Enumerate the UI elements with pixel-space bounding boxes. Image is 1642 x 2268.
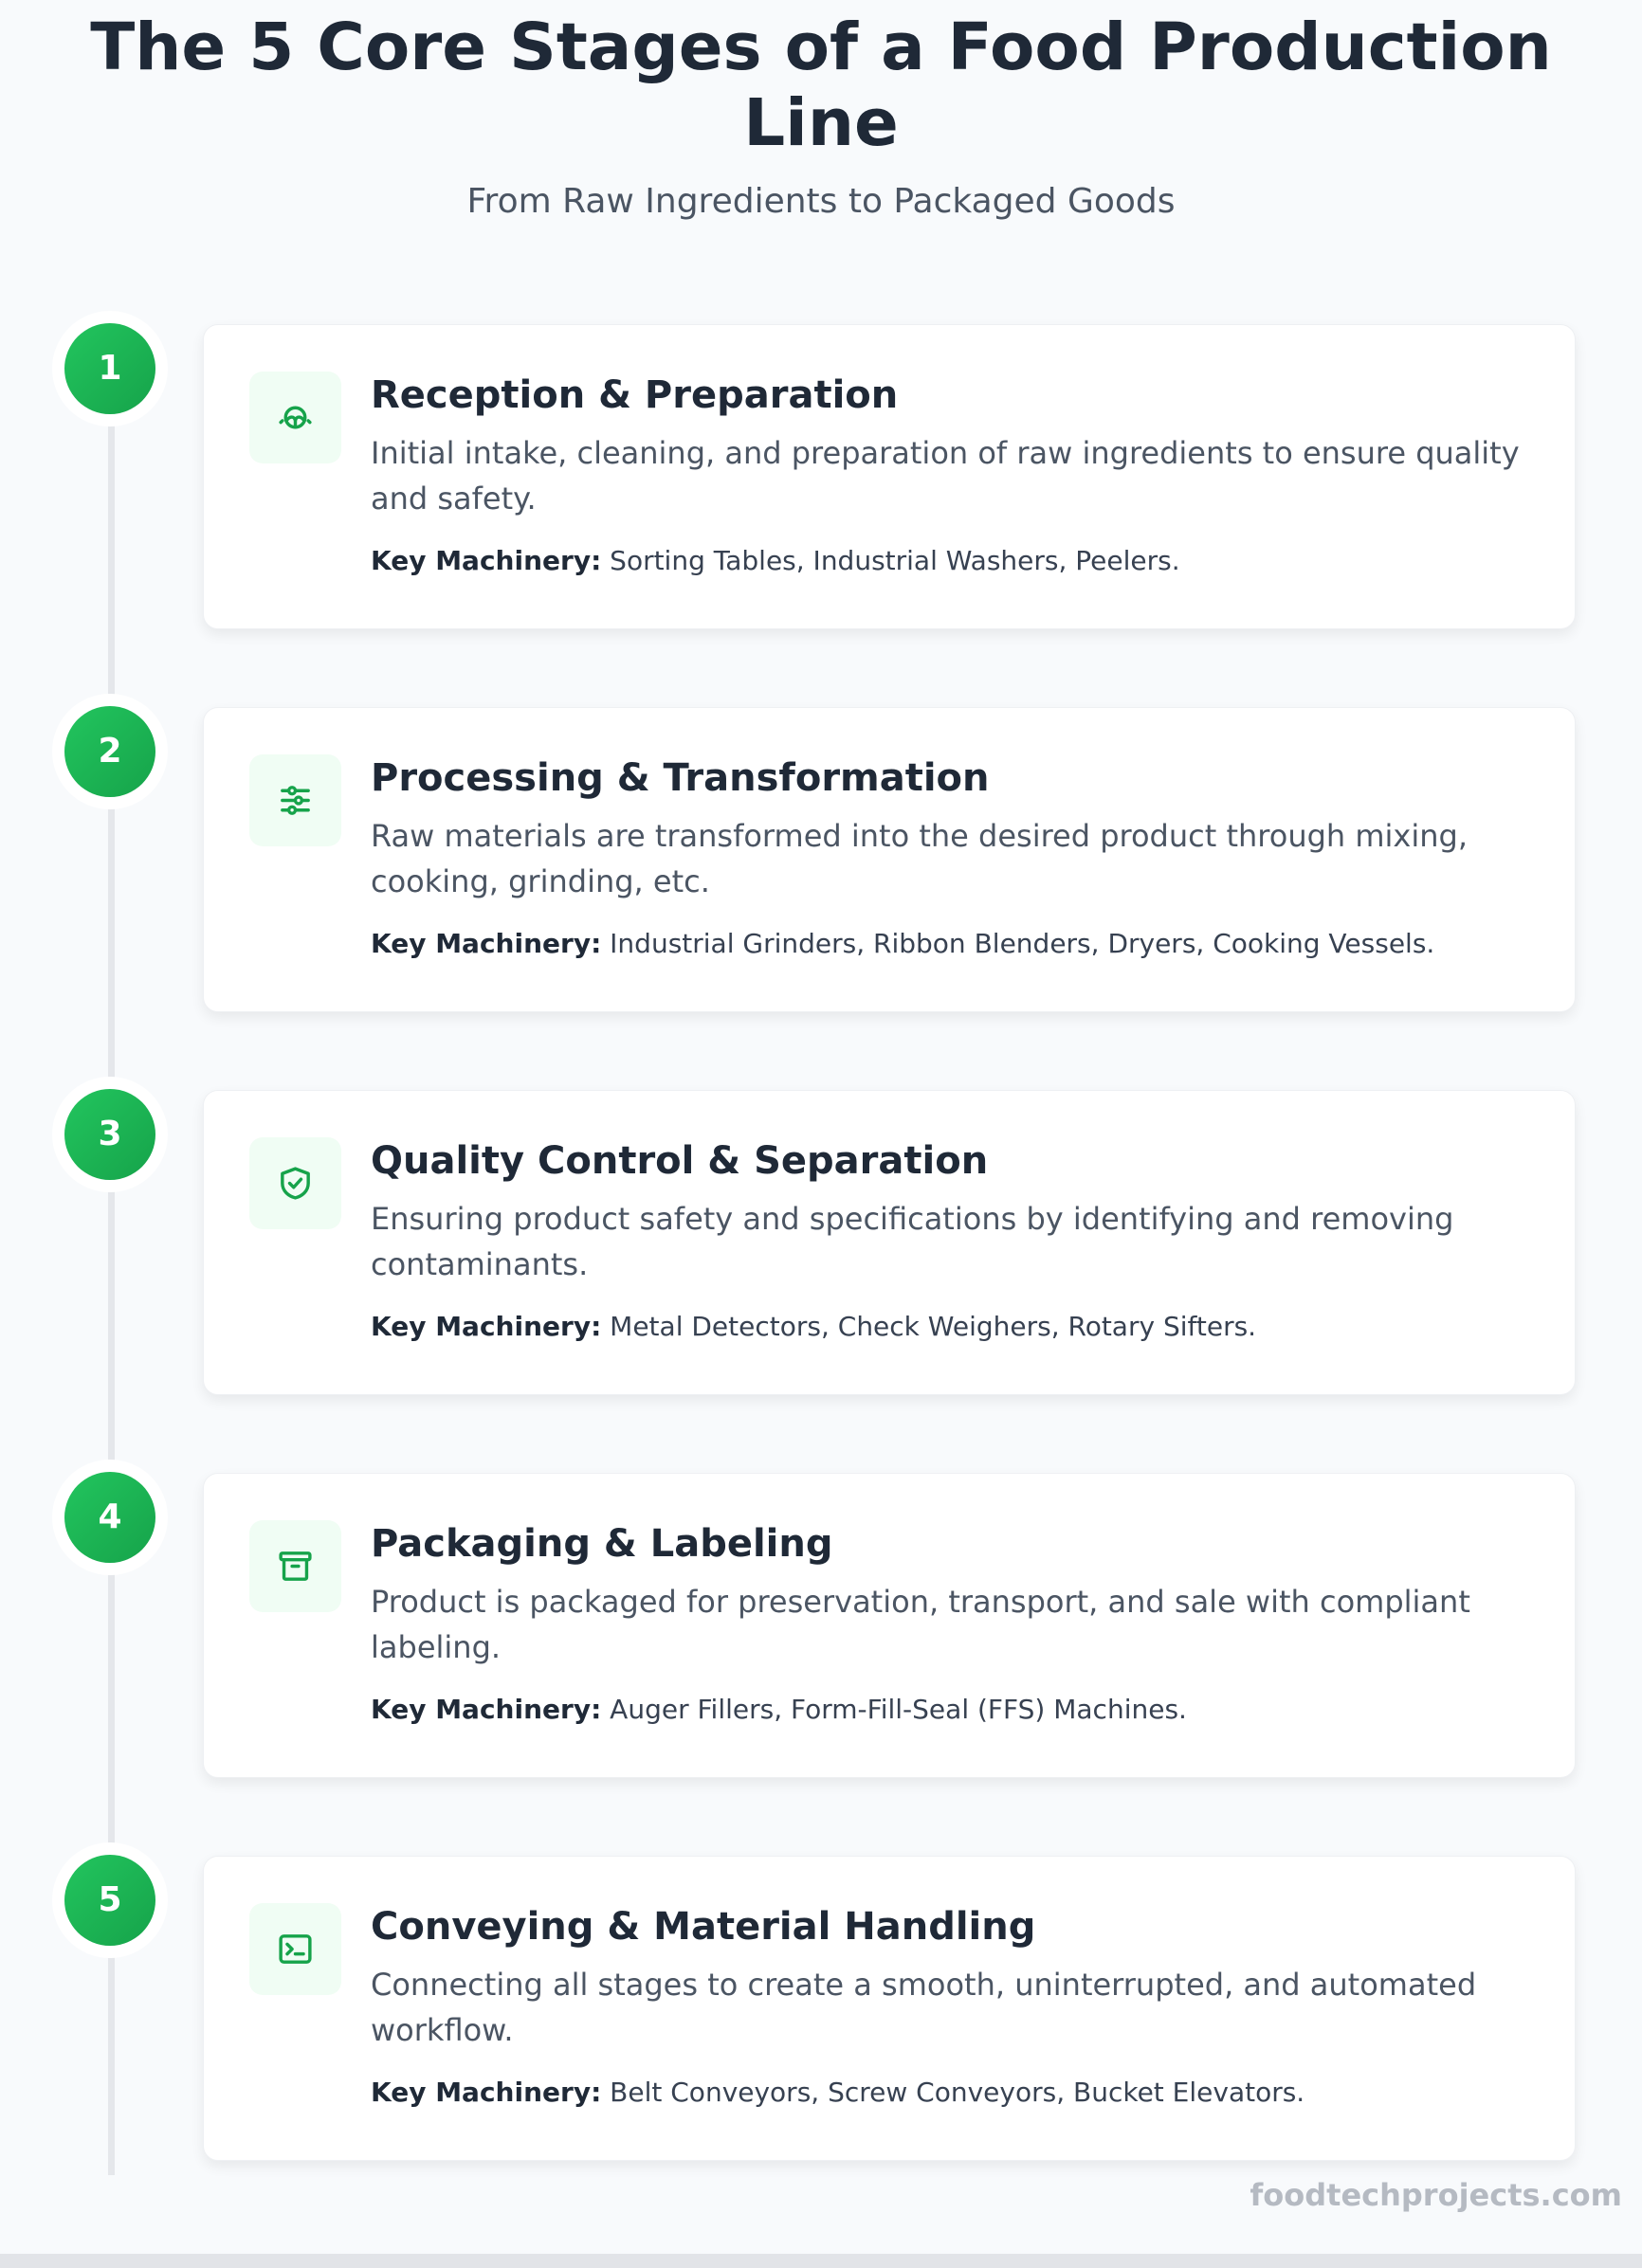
title: Line: [743, 85, 899, 161]
key machinery: Key Machinery: Industrial Grinders, Ribbon Blenders, Dryers, Cooking Vessels.: [371, 928, 1434, 959]
step marker 2: 2: [98, 732, 122, 771]
step marker 1: [52, 311, 168, 426]
heading: Conveying & Material Handling: [371, 1905, 1035, 1949]
heading: Reception & Preparation: [371, 373, 898, 417]
description: Ensuring product safety and specifications by identifying and removing contaminants.: [371, 1201, 1453, 1282]
step marker 3: 3: [98, 1115, 122, 1153]
title: The 5 Core Stages of a Food Production: [90, 9, 1552, 85]
icon: terminal: [249, 1903, 341, 1995]
icon: shield check: [249, 1137, 341, 1229]
heading: Processing & Transformation: [371, 756, 990, 800]
key machinery: Key Machinery: Auger Fillers, Form-Fill-Seal (FFS) Machines.: [371, 1694, 1187, 1725]
card: quality control: [203, 1090, 1576, 1395]
key machinery: Key Machinery: Sorting Tables, Industrial Washers, Peelers.: [371, 545, 1180, 576]
card: conveying: [203, 1856, 1576, 2161]
description: Connecting all stages to create a smooth, uninterrupted, and automated workflow.: [371, 1967, 1476, 2048]
step marker 5: 5: [98, 1880, 122, 1919]
heading: Packaging & Labeling: [371, 1522, 832, 1566]
icon: box: [249, 1520, 341, 1612]
step marker 2: [52, 694, 168, 809]
footer credit: foodtechprojects.com: [1250, 2177, 1622, 2213]
subtitle: From Raw Ingredients to Packaged Goods: [466, 182, 1176, 221]
card: packaging: [203, 1473, 1576, 1778]
heading: Quality Control & Separation: [371, 1139, 988, 1183]
step marker 4: [52, 1460, 168, 1575]
card: processing: [203, 707, 1576, 1012]
card: reception & preparation: [203, 324, 1576, 629]
icon: ingredient: [249, 372, 341, 463]
key machinery: Key Machinery: Metal Detectors, Check Weighers, Rotary Sifters.: [371, 1311, 1256, 1342]
title: [90, 9, 1552, 161]
step marker 5: [52, 1842, 168, 1958]
icon: sliders: [249, 754, 341, 846]
step marker 4: 4: [98, 1497, 122, 1536]
key machinery: Key Machinery: Belt Conveyors, Screw Conveyors, Bucket Elevators.: [371, 2077, 1304, 2108]
step marker 3: [52, 1077, 168, 1192]
description: Initial intake, cleaning, and preparation of raw ingredients to ensure quality and safety.: [371, 435, 1520, 517]
description: Product is packaged for preservation, transport, and sale with compliant labeling.: [371, 1584, 1470, 1665]
description: Raw materials are transformed into the desired product through mixing, cooking, grinding, etc.: [371, 818, 1468, 899]
step marker 1: 1: [98, 349, 122, 388]
timeline line: [108, 417, 115, 2175]
